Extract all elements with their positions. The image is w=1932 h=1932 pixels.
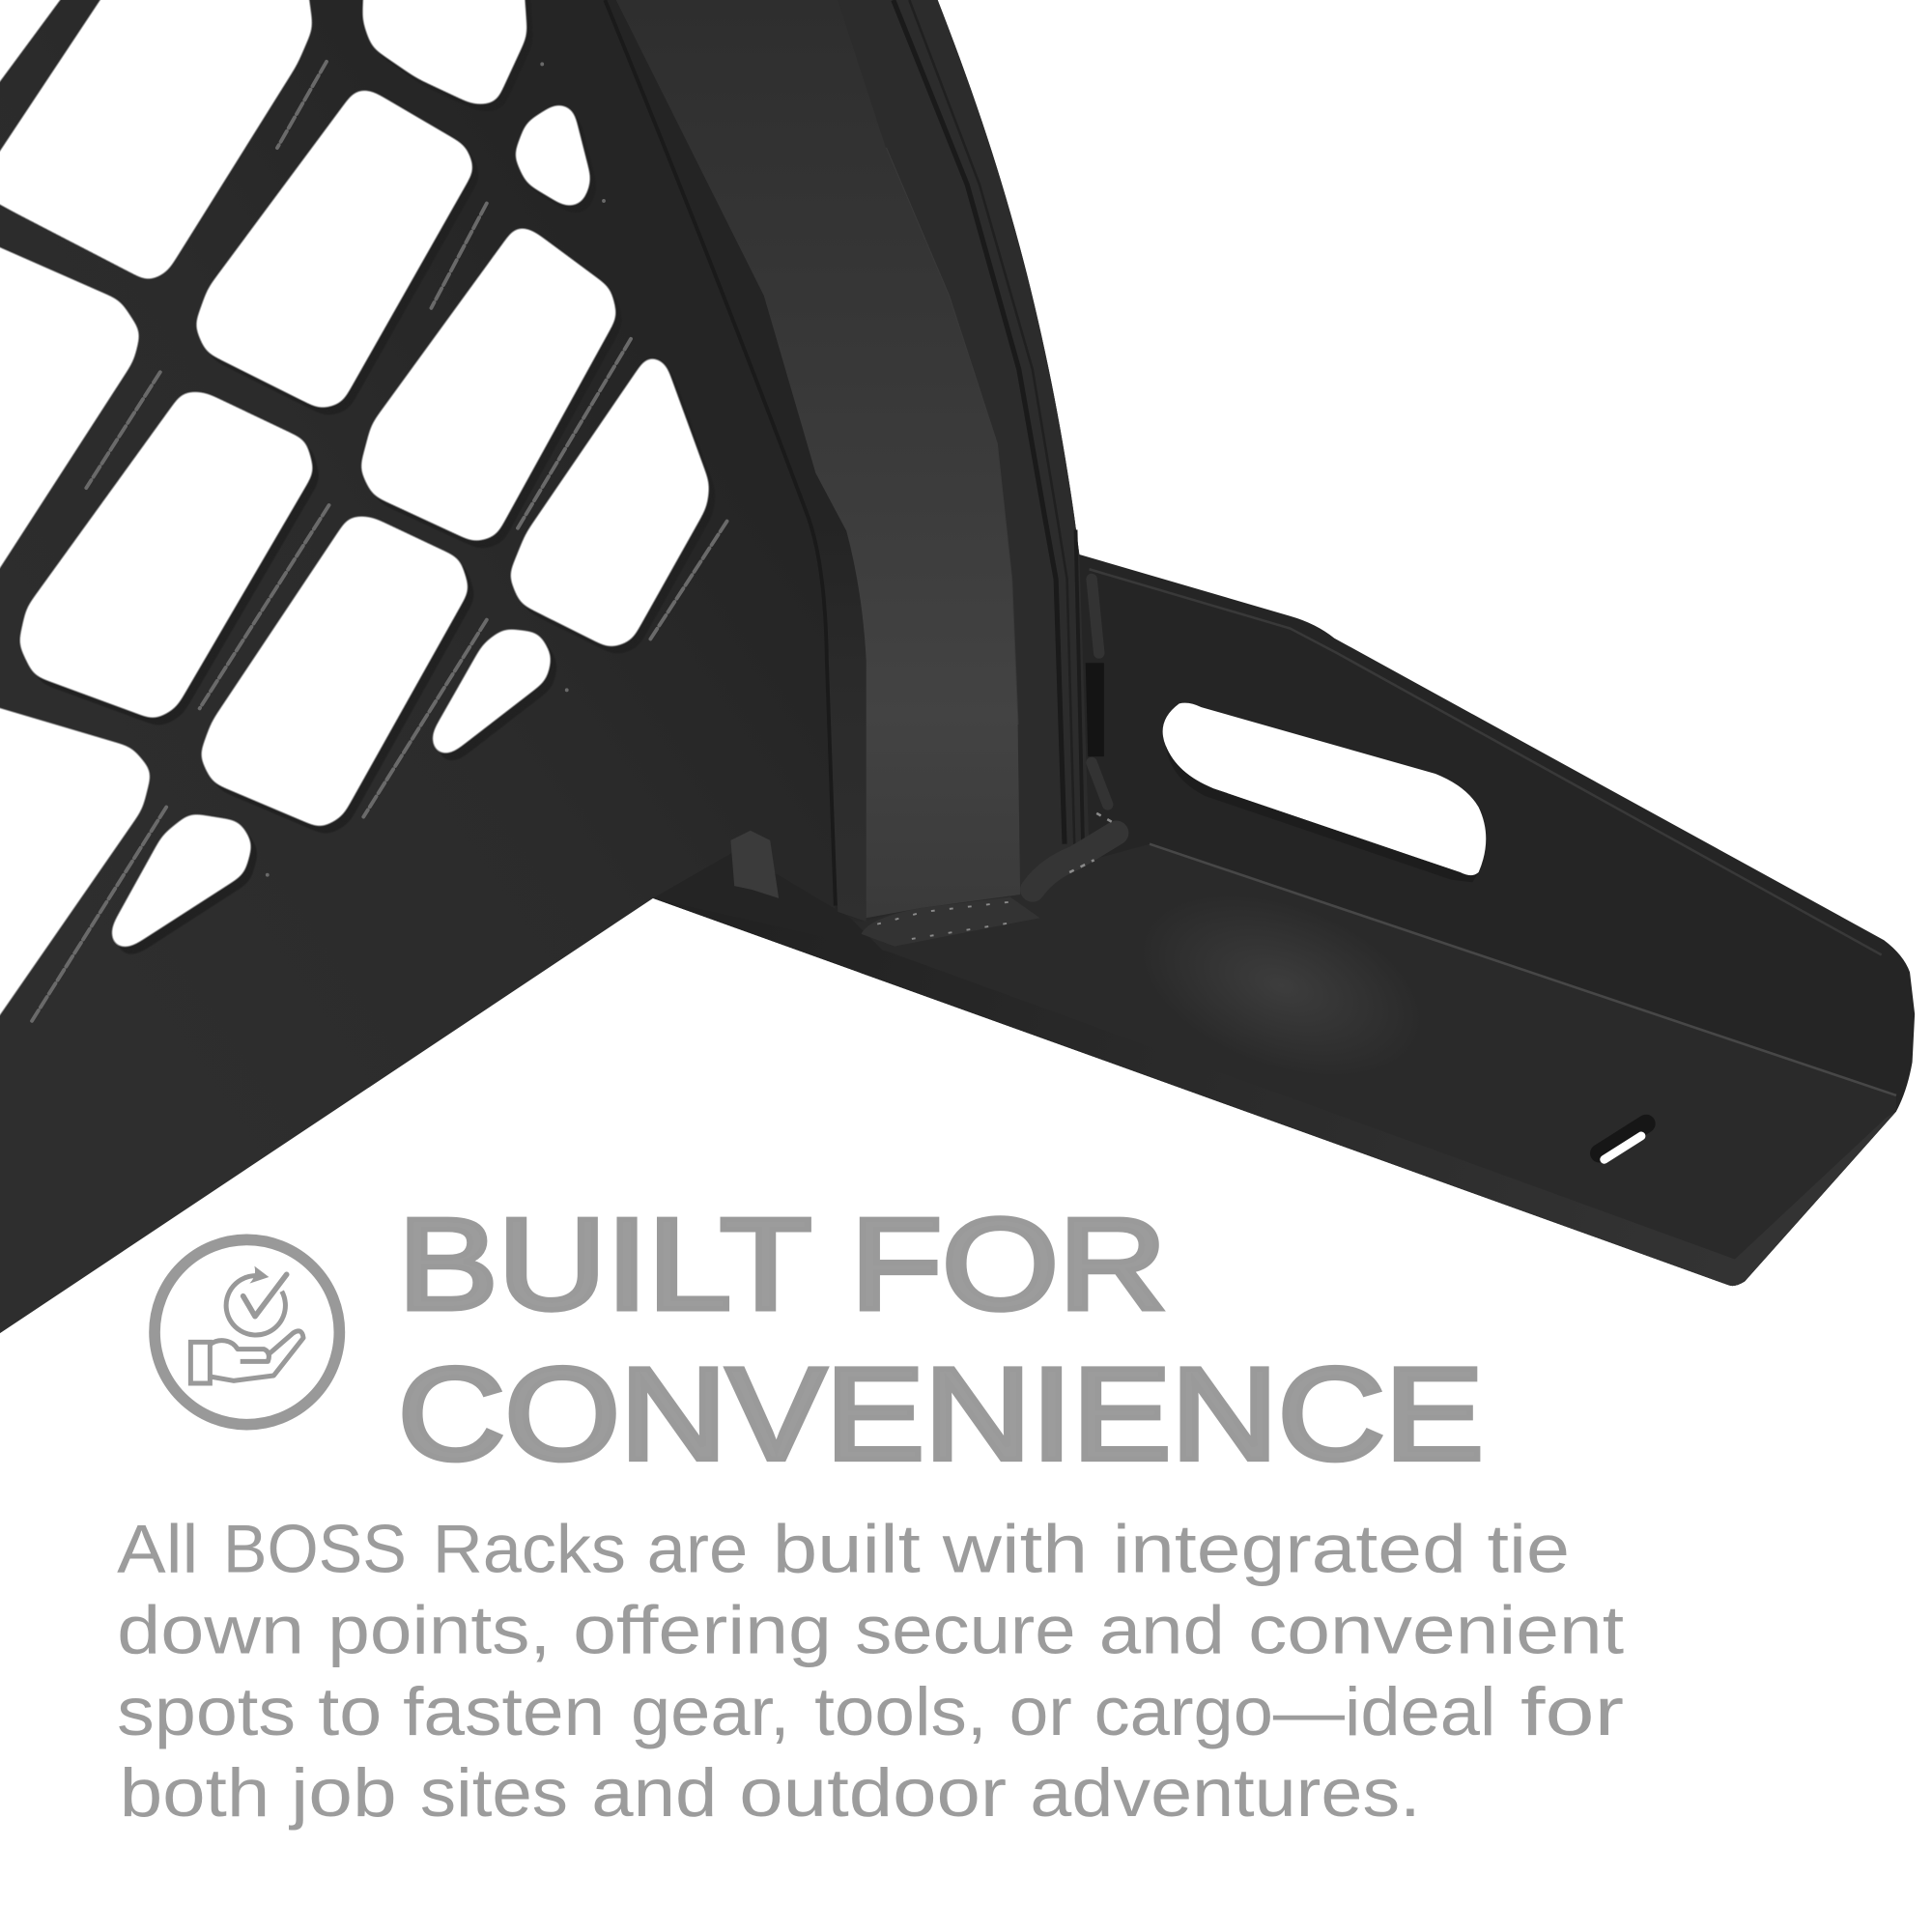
foot flange edge and bend [1090,569,1896,1095]
mounting slot wall [1166,746,1479,882]
heading line 1: BUILT FOR [398,1193,1167,1337]
body line 1 [117,1511,1570,1587]
upright channel lines [886,0,1083,850]
mounting slot [1163,703,1486,875]
metal silhouette [0,0,1915,1333]
body line 3: tools, [814,1673,987,1749]
tie-down hole [1600,1123,1646,1159]
base plate edge band [653,898,1896,1286]
body line 1: tie [1488,1511,1570,1587]
body line 2: offering [573,1592,832,1668]
cut edge highlights [31,62,727,1023]
product photo: rack bracket [0,0,1915,1333]
body line 2: secure [855,1592,1076,1668]
body line 3: cargo—ideal [1094,1673,1495,1749]
rear channel of upright [838,0,1090,895]
mesh holes [0,0,705,1060]
icon check mark [243,1274,287,1317]
body line 3 [117,1673,1624,1749]
body line 2: convenient [1248,1592,1624,1668]
tube side face [809,518,867,922]
body line 4: job [289,1754,397,1831]
body line 3: to [318,1673,382,1749]
body line 1: BOSS [223,1511,407,1587]
body line 1: integrated [1113,1511,1466,1587]
dark slot by foot [1086,663,1104,756]
body line 2: down [117,1592,304,1668]
hole walls [30,0,711,950]
icon cuff [190,1342,210,1383]
body line 1: built [773,1511,921,1587]
body line 3: or [1009,1673,1072,1749]
body line 4 [120,1754,1421,1831]
body line 3: fasten [403,1673,605,1749]
icon: hand holding check mark [155,1239,339,1425]
body line 4: adventures. [1030,1754,1421,1831]
body text [117,1511,1624,1831]
body line 1: with [942,1511,1088,1587]
base plate left strip [653,850,887,955]
neck band [605,0,867,922]
icon arrowhead [249,1266,269,1284]
body line 3: gear, [631,1673,790,1749]
gusset to tube seam [605,0,836,906]
body line 1: All [117,1511,198,1587]
body line 4: sites [420,1754,568,1831]
heading line 2: CONVENIENCE [398,1341,1484,1487]
welds [862,579,1117,947]
gusset tab [730,831,779,898]
body line 1: are [647,1511,748,1587]
icon ring [155,1239,339,1425]
body line 2: and [1099,1592,1225,1668]
body line 1: Racks [433,1511,626,1587]
body line 4: and [591,1754,717,1831]
body line 3: for [1520,1673,1624,1749]
lower face highlight [1115,859,1448,1113]
base plate lower face [653,844,1896,1286]
body line 4: both [120,1754,270,1831]
heading [398,1193,1484,1487]
upright tube [616,0,1020,918]
icon hand [210,1331,303,1380]
body line 3: spots [117,1673,296,1749]
body line 2 [117,1592,1624,1668]
body line 2: points, [327,1592,551,1668]
icon circular arrow [226,1276,285,1335]
body line 4: outdoor [739,1754,1007,1831]
